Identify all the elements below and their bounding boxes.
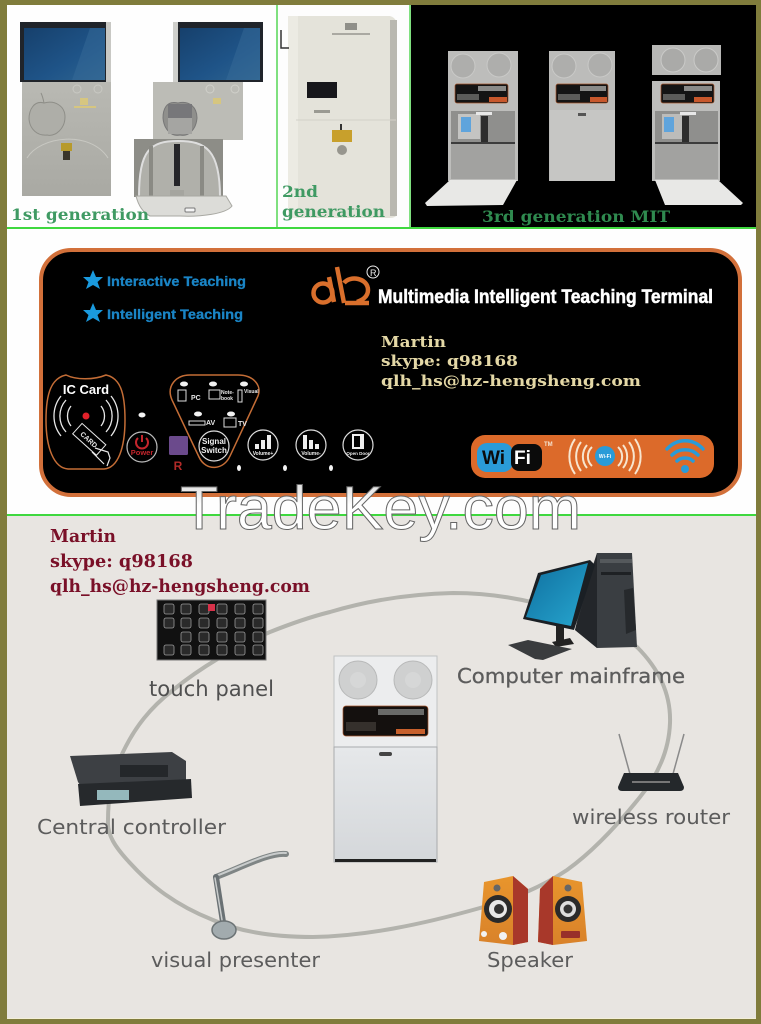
panel: second generation: generation (282, 202, 385, 221)
contact details (50, 526, 310, 597)
signal source selector (170, 375, 259, 467)
signal source selector: Signal (202, 437, 226, 446)
feature list: Intelligent Teaching (107, 306, 243, 322)
indicator lights (237, 465, 333, 471)
icon: wireless router (618, 734, 684, 791)
contact details: Martin (50, 526, 116, 547)
wifi badge strip: Fi (514, 448, 531, 469)
device: third generation exploded (652, 45, 743, 205)
device: first generation closed (20, 22, 111, 196)
signal source selector: PC (191, 395, 201, 402)
wifi badge strip (471, 435, 714, 478)
panel: first generation (7, 5, 276, 227)
divider lines (7, 227, 756, 516)
open door button (343, 430, 373, 460)
device: first generation open (134, 22, 263, 216)
open door button: Open Door (346, 451, 370, 456)
icon: computer mainframe (508, 553, 637, 660)
volume up button: Volume+ (253, 451, 273, 457)
icon: visual presenter (212, 853, 286, 939)
signal source selector: Note- (221, 390, 234, 396)
label: central controller: Central controller (37, 815, 227, 839)
volume down button: Volume- (301, 451, 321, 457)
panel: second generation (276, 5, 411, 227)
feature list (83, 270, 246, 322)
product title: Multimedia Intelligent Teaching Terminal (378, 287, 713, 308)
icon: speakers (479, 876, 587, 945)
label: 1st generation: 1st generation (11, 205, 149, 224)
device: second generation cabinet (281, 16, 397, 218)
contact details: qlh_hs@hz-hengsheng.com (381, 372, 641, 390)
contact details (381, 333, 641, 390)
icon: central controller (70, 752, 192, 806)
feature list: Interactive Teaching (107, 273, 246, 289)
signal source selector: Visual (244, 389, 259, 395)
contact details: Martin (381, 333, 446, 351)
brand logo (314, 266, 379, 303)
IC card reader: IC Card (63, 382, 109, 397)
signal source selector: AV (206, 420, 216, 427)
device: third generation closed (549, 51, 615, 181)
label: visual presenter: visual presenter (151, 948, 321, 972)
contact details: skype: q98168 (50, 551, 193, 572)
panel: third generation (411, 5, 756, 227)
label: wireless router: wireless router (572, 805, 731, 829)
volume up button (248, 430, 278, 460)
IC card reader (46, 375, 125, 469)
label: speaker: Speaker (487, 948, 574, 972)
label: touch panel: touch panel (149, 677, 274, 701)
IC card reader: CARD (78, 431, 98, 450)
infrared receiver window (169, 436, 188, 473)
signal source selector: book (221, 396, 233, 402)
label: 2nd generation: 2nd (282, 182, 318, 201)
label: computer mainframe: Computer mainframe (457, 664, 685, 688)
wifi badge strip: TM (544, 442, 553, 448)
panel: control panel area (7, 229, 756, 514)
watermark: TradeKey.com (180, 474, 581, 542)
central teaching terminal (334, 656, 437, 862)
infrared receiver window: R (174, 459, 183, 473)
control panel board (41, 250, 740, 495)
signal source selector: Switch (201, 446, 227, 455)
panel: system diagram (7, 516, 756, 1019)
connection ring (108, 593, 670, 937)
wifi badge strip: Wi (482, 448, 505, 469)
volume down button (296, 430, 326, 460)
wifi badge strip: Wi-Fi (599, 454, 612, 460)
contact details: skype: q98168 (381, 352, 518, 370)
device: third generation open left (425, 51, 518, 206)
icon: touch panel (157, 600, 266, 660)
signal source selector: TV (238, 421, 247, 428)
brand logo: R (370, 268, 377, 278)
contact details: qlh_hs@hz-hengsheng.com (50, 576, 310, 597)
power button (127, 412, 157, 462)
power button: Power (131, 448, 153, 457)
label: 3rd generation MIT: 3rd generation MIT (482, 207, 670, 226)
